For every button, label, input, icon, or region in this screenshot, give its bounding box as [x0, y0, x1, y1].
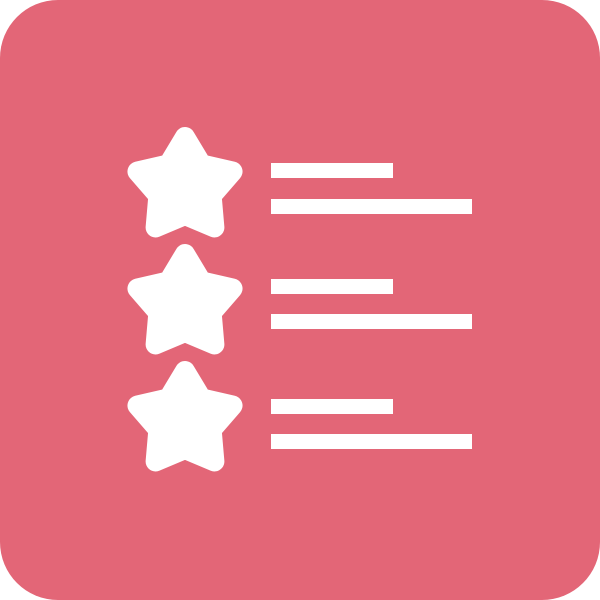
- bars 1: [271, 163, 472, 214]
- icon: star 1: [137, 137, 233, 227]
- row 3: [137, 371, 472, 461]
- row 1: [137, 137, 472, 227]
- icon: star 3: [137, 371, 233, 461]
- bars 3: [271, 399, 472, 449]
- icon: star 2: [137, 254, 233, 344]
- bars 2: [271, 279, 472, 329]
- row 2: [137, 254, 472, 344]
